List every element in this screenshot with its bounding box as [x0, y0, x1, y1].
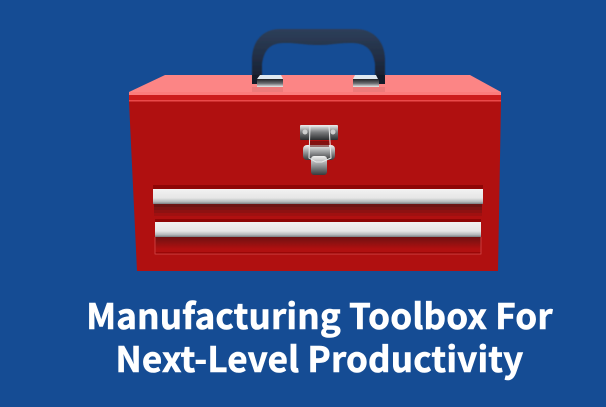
latch — [300, 125, 338, 175]
title — [86, 289, 553, 382]
drawers — [153, 185, 483, 254]
handle brackets — [252, 75, 385, 92]
lid — [129, 75, 501, 102]
title: Next-Level Productivity — [116, 332, 523, 382]
handle — [252, 29, 385, 83]
drawer handle top — [153, 189, 483, 204]
title: Manufacturing Toolbox For — [86, 289, 553, 340]
box body — [129, 102, 501, 271]
drawer handle bottom — [155, 222, 481, 237]
